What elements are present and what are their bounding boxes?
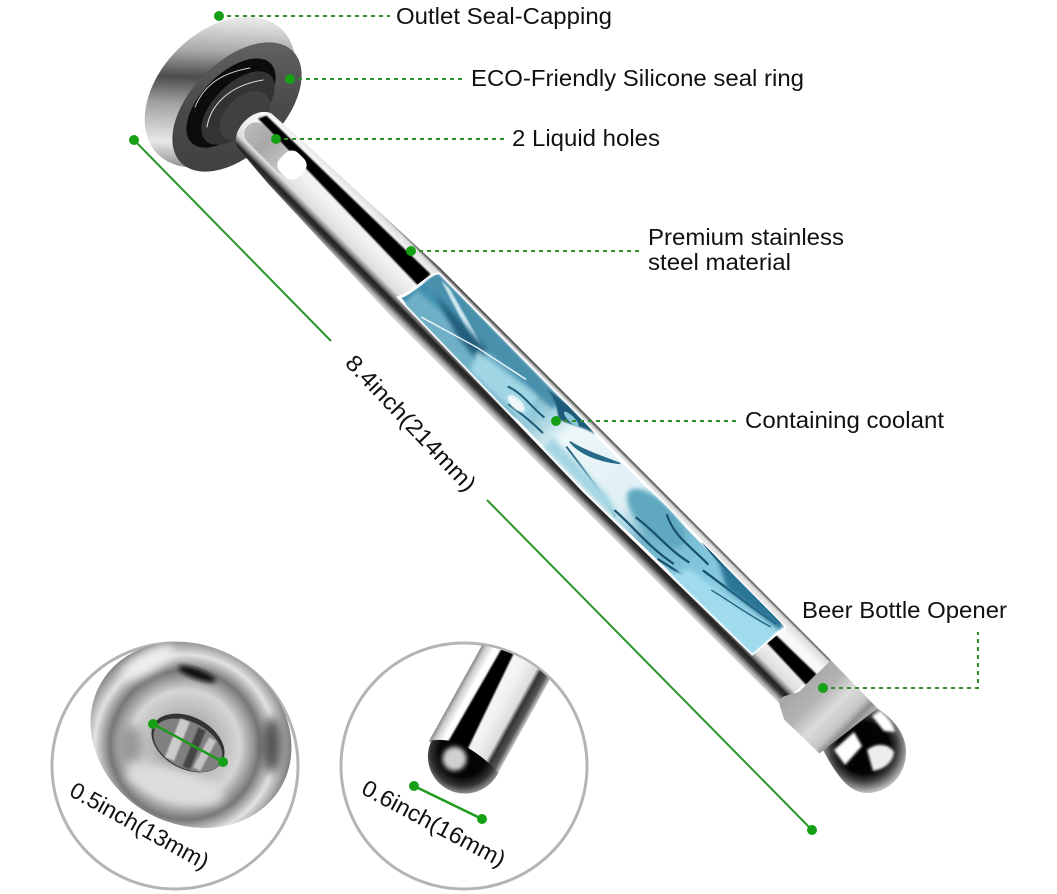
ball highlights [834, 711, 895, 771]
outlet hole [141, 702, 235, 784]
cap dark front face [149, 19, 325, 195]
liquid hole opening [274, 147, 310, 184]
icon: outlet seal cap [115, 0, 325, 197]
liquid hole slot [240, 118, 301, 179]
callout: beer bottle opener [802, 597, 1007, 693]
panel: outlet diameter detail [52, 630, 310, 889]
dimension: overall length [129, 135, 817, 835]
callout: silicone seal ring [285, 65, 804, 91]
callout: outlet seal-capping [214, 3, 612, 29]
silicone seal ring hole [171, 43, 291, 163]
callout: liquid holes: 2 Liquid holes [512, 125, 660, 151]
cap back metal shell [115, 0, 325, 197]
panel: outlet diameter detail: 0.5inch(13mm) [66, 777, 214, 875]
callout: silicone seal ring: ECO-Friendly Silicone seal ring [471, 65, 804, 91]
coolant window [394, 265, 789, 659]
callout: outlet seal-capping: Outlet Seal-Capping [396, 3, 612, 29]
callout: beer bottle opener: Beer Bottle Opener [802, 597, 1007, 623]
rod body [220, 97, 831, 708]
black reflection stripe upper [254, 110, 431, 286]
dimension: overall length: 8.4inch(214mm) [340, 350, 482, 497]
ball tip of rod [823, 708, 906, 793]
black reflection stripe lower [765, 633, 817, 685]
callout: coolant [551, 407, 945, 433]
outlet diameter measure [148, 719, 228, 767]
callout: stainless steel [406, 224, 844, 275]
stainless steel rod [220, 97, 831, 708]
silicone seal ring [189, 59, 287, 157]
callout: stainless steel: Premium stainless [648, 224, 844, 250]
rod closeup [428, 646, 550, 794]
callout: coolant: Containing coolant [745, 407, 945, 433]
panel: rod diameter detail: 0.6inch(16mm) [358, 774, 510, 872]
cap closeup metal [90, 642, 292, 828]
callout: stainless steel: steel material [648, 249, 791, 275]
panel: rod diameter detail [341, 627, 587, 889]
rod diameter measure [409, 781, 487, 824]
bottle opener band [772, 654, 878, 761]
callout: liquid holes [271, 125, 660, 151]
